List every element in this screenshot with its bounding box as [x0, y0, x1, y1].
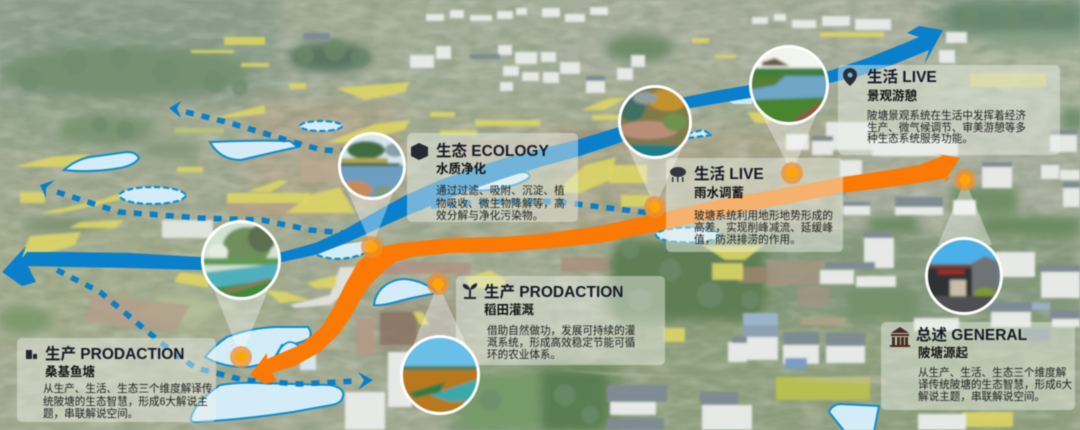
panel: rainwater	[666, 158, 843, 252]
photo circle: landscape pond	[748, 44, 830, 126]
text: general: 译传统陂塘的生态智慧，形成6大	[918, 378, 1073, 391]
fields	[85, 295, 190, 332]
panel: mulberry fish pond	[17, 338, 216, 422]
text: landscape	[843, 68, 1026, 145]
orange production flow arrow	[250, 153, 960, 384]
text: paddy irrigation: 借助自然做功，发展可持续的灌	[487, 324, 636, 337]
text: general: 陂塘源起	[918, 345, 969, 360]
blue dashed routes	[40, 101, 650, 390]
text: rainwater: 生活 LIVE	[694, 165, 764, 183]
text: landscape: 陂塘景观系统在生活中发挥着经济	[867, 109, 1026, 122]
houses	[345, 7, 1080, 430]
text: general	[890, 325, 1073, 403]
text: mulberry fish pond: 统陂塘的生态智慧，形成6大解说主	[43, 395, 208, 408]
location dots	[230, 162, 976, 368]
text: landscape: 生产、微气候调节、审美游憩等多	[867, 121, 1026, 134]
text: landscape: 生活 LIVE	[867, 68, 937, 86]
text: general: 从生产、生活、生态三个维度解	[918, 366, 1067, 379]
text: landscape: 种生态系统服务功能。	[867, 132, 973, 145]
text: general: 总述 GENERAL	[916, 325, 1027, 344]
text: rainwater: 雨水调蓄	[694, 185, 744, 200]
icon: map pin	[843, 68, 857, 86]
text: paddy irrigation: 环的农业体系。	[487, 348, 561, 361]
text: rainwater: 玻塘系统利用地形地势形成的	[694, 209, 833, 222]
panel: ecology	[407, 133, 578, 222]
yellow patches	[224, 37, 265, 45]
icon: temple	[890, 327, 910, 347]
text: ecology	[411, 141, 565, 222]
text: paddy irrigation	[463, 283, 636, 361]
callout pointers	[214, 115, 992, 357]
text: rainwater	[670, 165, 833, 246]
text: ecology: 生态 ECOLOGY	[436, 141, 549, 160]
text: ecology: 水质净化	[436, 161, 487, 176]
icon: cube	[411, 143, 428, 160]
icon: building block	[26, 350, 37, 359]
text: mulberry fish pond: 生产 PRODACTION	[45, 345, 185, 363]
icon: sprout	[463, 283, 477, 299]
text: landscape: 景观游憩	[867, 88, 918, 103]
panel: general	[881, 322, 1075, 410]
water ponds	[64, 96, 879, 430]
text: rainwater: 高差，实现削峰减流、延缓峰	[694, 221, 833, 234]
panel: landscape	[838, 65, 1060, 155]
blue ecological flow arrow	[2, 26, 943, 286]
text: paddy irrigation: 溉系统，形成高效稳定节能可循	[487, 336, 636, 349]
text: mulberry fish pond: 桑基鱼塘	[45, 364, 96, 379]
text: paddy irrigation: 生产 PRODACTION	[484, 283, 624, 301]
photo circle: aerial garden	[617, 84, 693, 160]
panel: paddy irrigation	[456, 276, 665, 365]
photo circle: willow pond	[200, 219, 282, 301]
text: ecology: 效分解与净化污染物。	[436, 209, 543, 222]
text: ecology: 通过过滤、吸附、沉淀、植	[436, 184, 565, 197]
photo circle: heritage gate	[924, 236, 1004, 316]
text: mulberry fish pond	[26, 345, 213, 420]
photo circle: paddy field	[399, 334, 481, 416]
text: general: 解说主题，串联解说空间。	[918, 390, 1045, 403]
text: ecology: 物吸收、微生物降解等，高	[436, 197, 565, 210]
icon: rain cloud	[670, 167, 686, 182]
text: rainwater: 值，防洪排涝的作用。	[694, 233, 801, 246]
text: mulberry fish pond: 从生产、生活、生态三个维度解译传	[43, 382, 213, 395]
photo circle: ecology wetland	[336, 130, 408, 202]
text: paddy irrigation: 稻田灌溉	[484, 302, 535, 317]
text: mulberry fish pond: 题，串联解说空间。	[43, 407, 138, 420]
